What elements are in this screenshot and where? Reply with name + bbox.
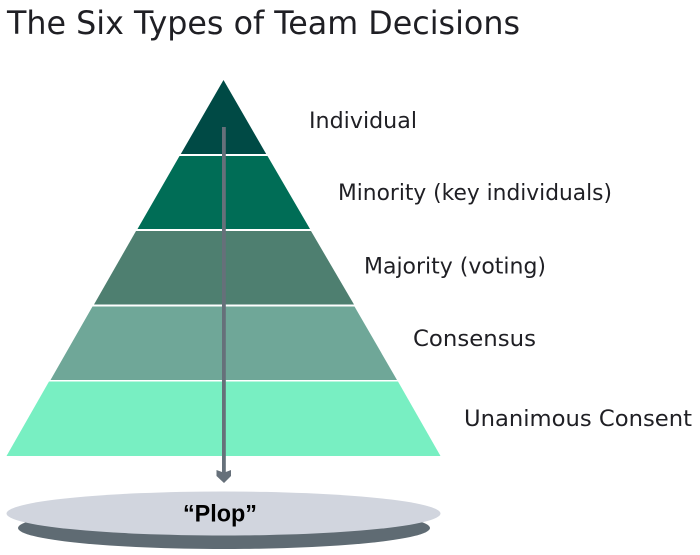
tier: individual <box>181 80 266 154</box>
label: majority: Majority (voting) <box>364 254 546 280</box>
pyramid <box>6 80 440 456</box>
label: individual: Individual <box>309 109 417 134</box>
plop label: “Plop” <box>183 500 257 528</box>
plop platform <box>6 492 440 549</box>
tier: minority <box>138 156 310 229</box>
label: unanimous consent: Unanimous Consent <box>464 407 692 432</box>
tier: majority <box>94 231 354 304</box>
tier: consensus <box>50 306 397 380</box>
label: consensus: Consensus <box>413 327 536 352</box>
platform disc <box>6 492 440 536</box>
tier: unanimous consent <box>6 382 440 456</box>
platform shadow <box>18 507 430 549</box>
arrow <box>216 127 231 483</box>
title: The Six Types of Team Decisions <box>6 4 520 42</box>
label: minority: Minority (key individuals) <box>338 181 612 206</box>
